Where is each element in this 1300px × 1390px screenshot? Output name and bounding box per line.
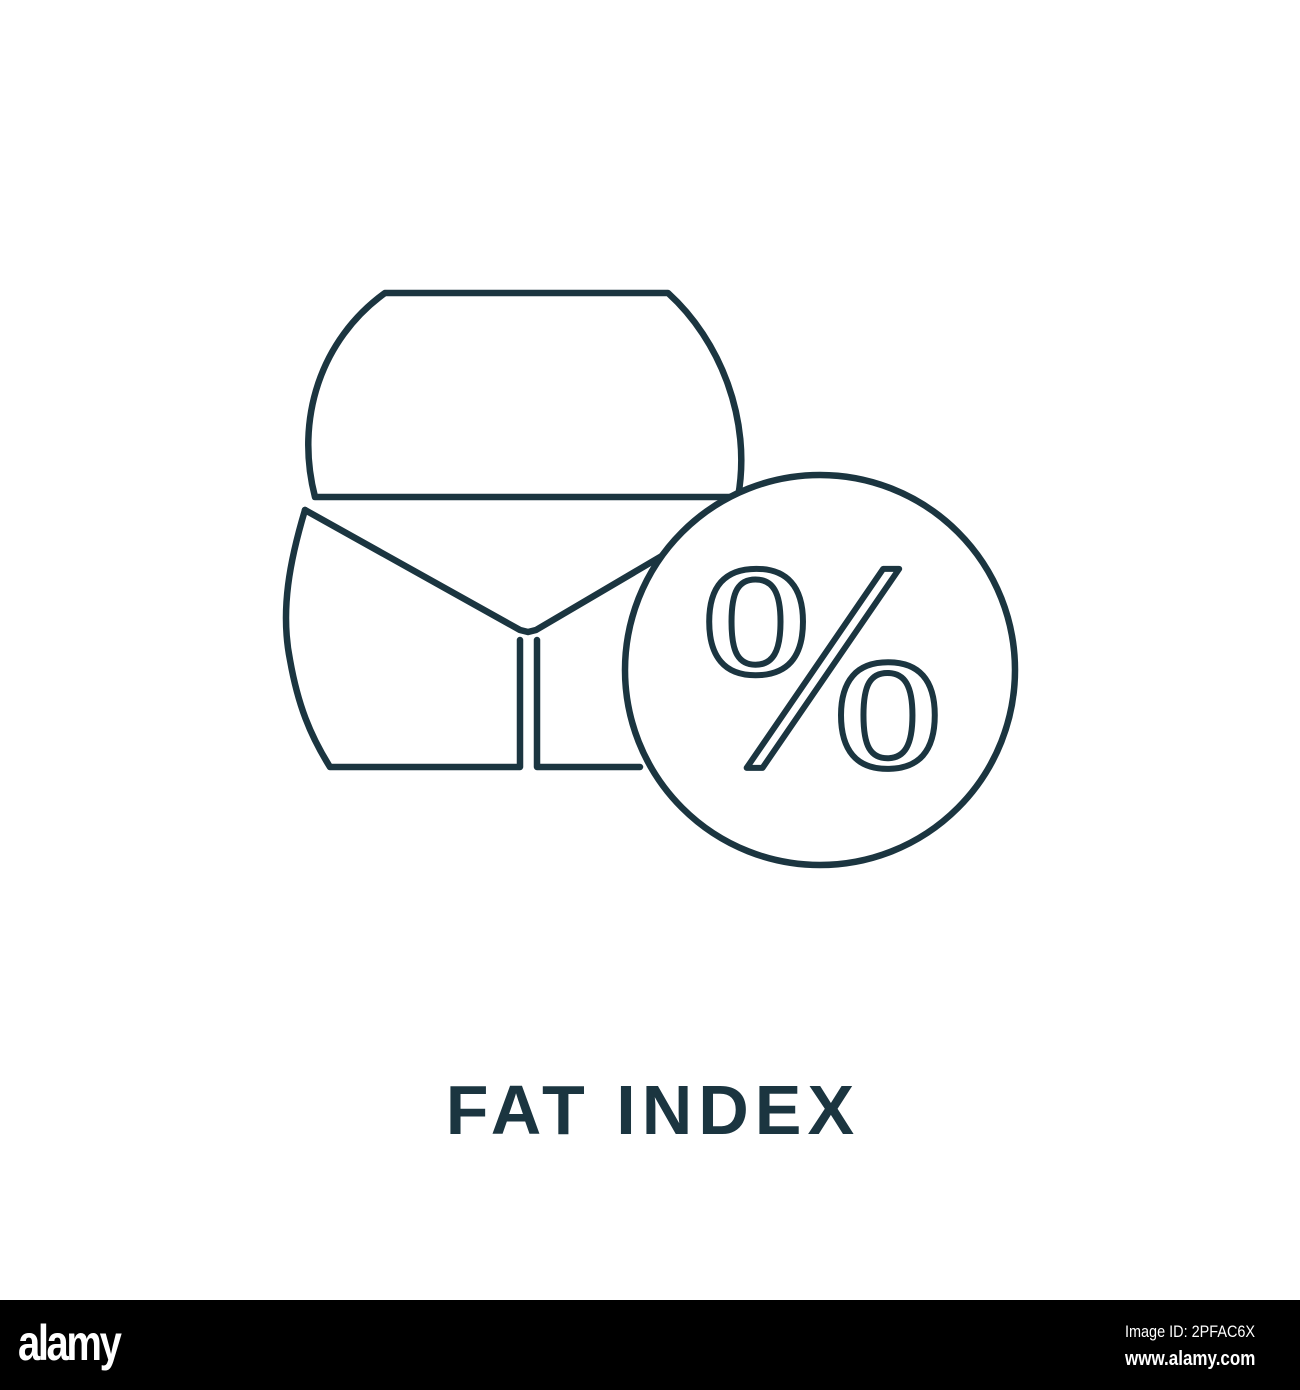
icon: percent circle: %: [699, 502, 945, 829]
icon: torso: [286, 293, 741, 767]
title: FAT INDEX: [446, 1071, 860, 1149]
image id: Image ID: 2PFAC6X: [1125, 1322, 1255, 1341]
url: www.alamy.com: [1125, 1348, 1255, 1370]
icon: percent circle: [625, 475, 1015, 865]
footer bar: [0, 1300, 1300, 1390]
logo: alamy: [18, 1315, 119, 1371]
